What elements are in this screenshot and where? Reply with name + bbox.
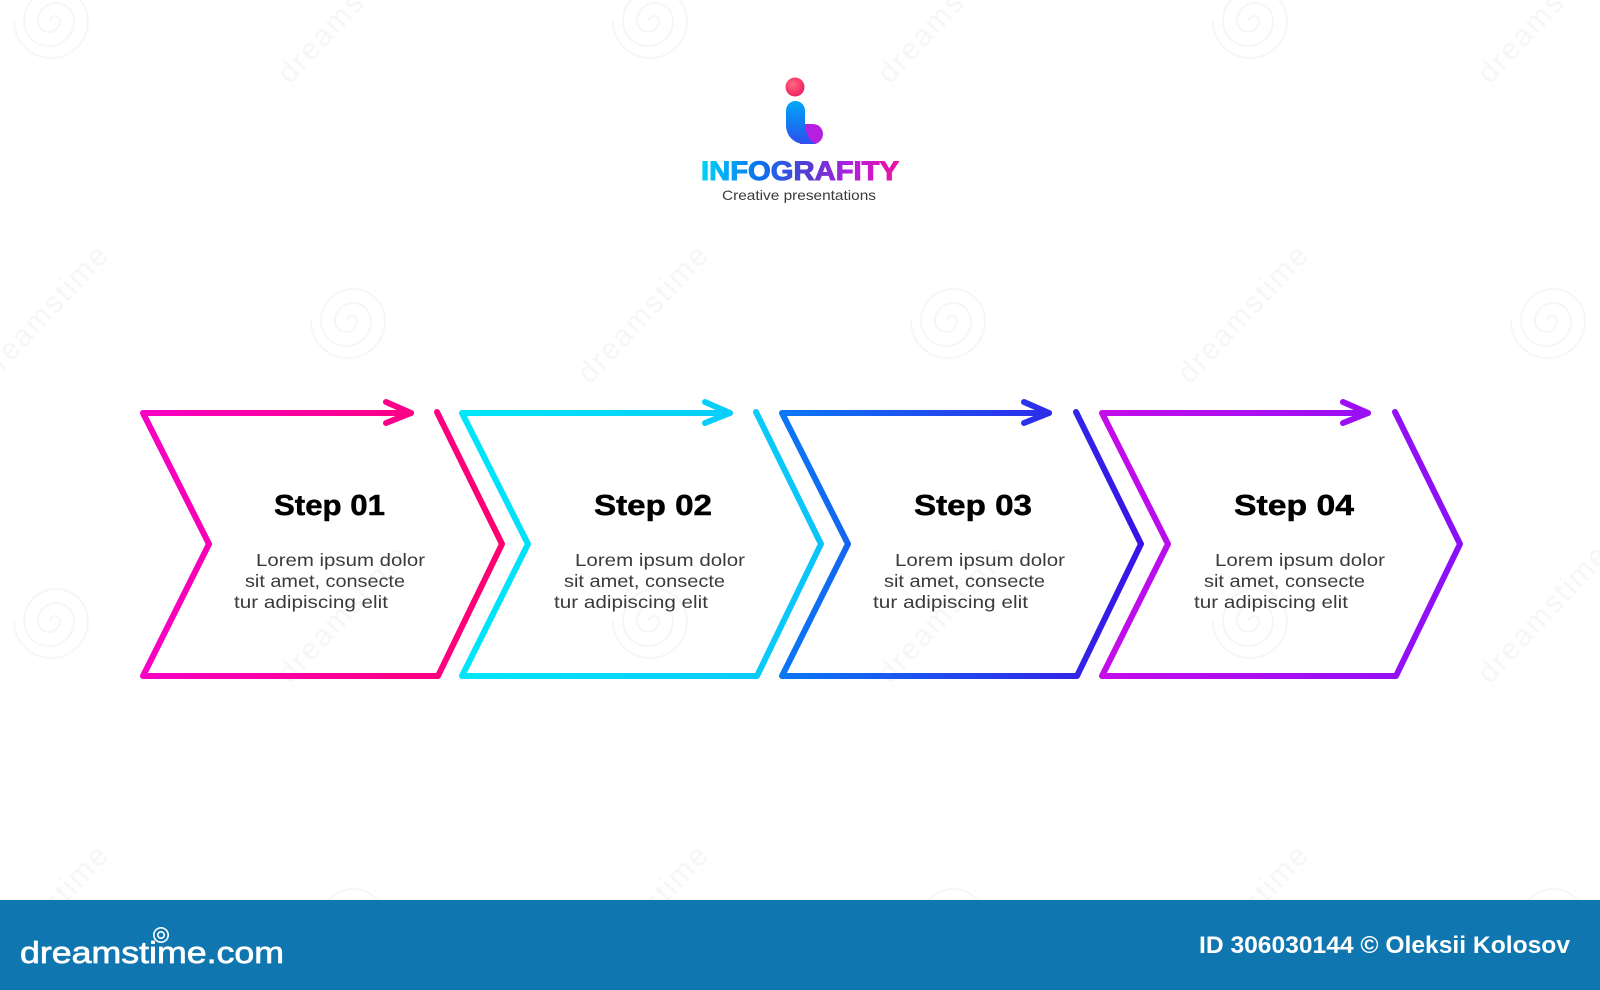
- watermark text: dreamstime: [1171, 239, 1314, 390]
- text block: step 03: tur adipiscing elit: [873, 592, 1028, 612]
- footer credit: ID 306030144 © Oleksii Kolosov: [1199, 932, 1571, 959]
- text block: step 04: sit amet, consecte: [1204, 571, 1365, 591]
- arrow outline: step 01: [143, 402, 502, 676]
- text block: step 04: [1194, 550, 1385, 612]
- arrow outline: step 04: [1102, 402, 1460, 676]
- watermark text: dreamstime: [1171, 839, 1314, 990]
- text block: step 01: tur adipiscing elit: [234, 592, 388, 612]
- text block: step 01: sit amet, consecte: [245, 571, 405, 591]
- text block: step 04: tur adipiscing elit: [1194, 592, 1348, 612]
- text block: step 02: [554, 550, 745, 612]
- panel: step 02: [462, 402, 821, 676]
- text block: step 01: Lorem ipsum dolor: [256, 550, 425, 570]
- heading: step 04: Step 04: [1234, 490, 1354, 522]
- heading: step 02: Step 02: [594, 490, 712, 522]
- logo: Infografity: [701, 78, 899, 203]
- heading: step 03: Step 03: [914, 490, 1032, 522]
- text block: step 03: [873, 550, 1065, 612]
- watermark text: dreamstime: [571, 839, 714, 990]
- text block: step 02: tur adipiscing elit: [554, 592, 708, 612]
- watermark text: dreamstime: [271, 539, 414, 690]
- footer brand: dreamstime.com: [20, 935, 284, 970]
- panel: step 03: [782, 402, 1141, 676]
- icon: brand spiral: [154, 928, 168, 942]
- text block: step 01: [234, 550, 425, 612]
- watermark text: dreamstime: [571, 239, 714, 390]
- watermark text: dreamstime: [871, 539, 1014, 690]
- text block: step 04: Lorem ipsum dolor: [1215, 550, 1385, 570]
- logo wordmark: INFOGRAFITY: [701, 156, 899, 186]
- footer bar: [0, 900, 1600, 990]
- icon: logo mark: [786, 78, 823, 144]
- heading: step 01: Step 01: [274, 490, 385, 522]
- panel: step 04: [1102, 402, 1460, 676]
- text block: step 02: sit amet, consecte: [564, 571, 725, 591]
- text block: step 02: Lorem ipsum dolor: [575, 550, 745, 570]
- logo tagline: Creative presentations: [722, 187, 876, 203]
- text block: step 03: sit amet, consecte: [884, 571, 1045, 591]
- text block: step 03: Lorem ipsum dolor: [895, 550, 1065, 570]
- arrow outline: step 02: [462, 402, 821, 676]
- arrow outline: step 03: [782, 402, 1141, 676]
- panel: step 01: [143, 402, 502, 676]
